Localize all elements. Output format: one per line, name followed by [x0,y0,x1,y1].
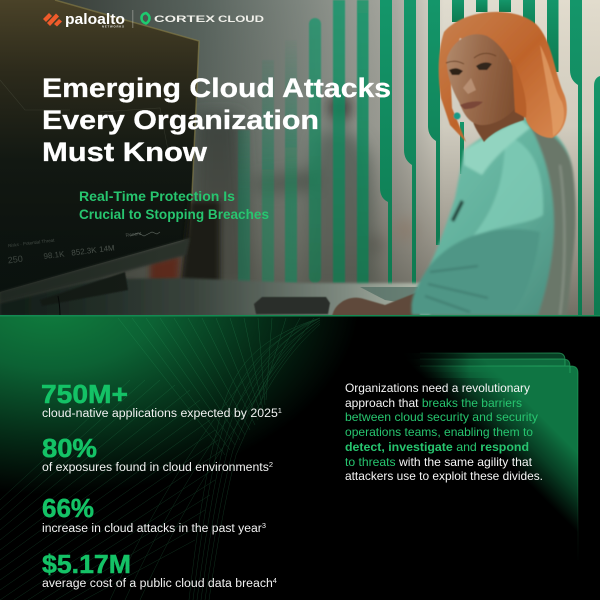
green vertical stripes [238,0,600,315]
title: Must Know [42,137,208,167]
paragraph text block: Organizations need a revolutionary [345,381,530,395]
logo: Cortex Cloud [142,13,264,25]
table [0,230,430,316]
paragraph text block: operations teams, enabling them to [345,425,533,439]
woman [332,12,576,316]
subtitle: Crucial to Stopping Breaches [79,207,269,222]
stat: 80%: of exposures found in cloud environments [42,462,255,474]
title [42,73,391,167]
paragraph text block: attackers use to exploit these divides. [345,469,543,483]
paragraph text block: detect, investigate and respond [345,440,529,454]
monitor dashboard numbers: 98.1K [43,249,66,261]
icon: palo alto mark [43,13,62,26]
background blurred colleagues [190,95,414,290]
hair and face [439,12,567,142]
logo: Palo Alto Networks: paloalto [65,11,125,28]
monitor [0,0,220,302]
monitor dashboard numbers: 14M [99,243,116,254]
stat: 80% [42,433,273,474]
paragraph text block: approach that breaks the barriers [345,396,522,410]
monitor dashboard numbers: 250 [7,254,23,265]
logo: Cortex Cloud: CORTEX [154,14,216,25]
fan of thin lines [0,318,320,600]
title: Emerging Cloud Attacks [42,73,391,103]
stat: 80%: 80% [42,433,97,463]
stat: $5.17M: average cost of a public cloud data breach [42,578,258,590]
stat: $5.17M [42,549,277,590]
stacked cards [390,345,578,600]
hoodie [412,117,576,315]
hand [332,292,420,316]
stat: 66%: 3 [262,523,266,530]
stat: 80%: 2 [269,462,273,469]
neck [472,100,525,142]
monitor dashboard numbers: 852.3K [71,245,98,258]
stat: 66%: 66% [42,493,94,523]
title: Every Organization [42,105,319,135]
panel: statistics background [0,315,600,600]
face [447,34,521,125]
logo: Cortex Cloud: CLOUD [218,14,264,25]
icon: cortex mark [142,13,150,24]
monitor dashboard numbers: Risks · Potential Threat [8,237,55,248]
monitor dashboard numbers [6,227,144,265]
subtitle [79,189,269,222]
logo: Palo Alto Networks [43,11,125,28]
stat: 750M+ [41,379,282,420]
stat: 66%: increase in cloud attacks in the past year [42,523,250,535]
stat: $5.17M: $5.17M [42,549,131,579]
stat: 66% [42,493,266,535]
paragraph text block: to threats with the same agility that [345,455,533,469]
stat: 750M+: cloud-native applications expected by 2025 [42,408,262,420]
panel: hero photo [0,0,600,316]
logo: Palo Alto Networks: NETWORKS [102,24,124,28]
divider [132,10,134,28]
subtitle: Real-Time Protection Is [79,189,235,204]
monitor dashboard numbers: Recent [125,231,142,239]
stat: 750M+: 750M+ [41,379,128,409]
paragraph text block: between cloud security and security [345,410,538,424]
stat: $5.17M: 4 [273,578,277,585]
paragraph text block [345,381,543,483]
stat: 750M+: 1 [278,408,282,415]
